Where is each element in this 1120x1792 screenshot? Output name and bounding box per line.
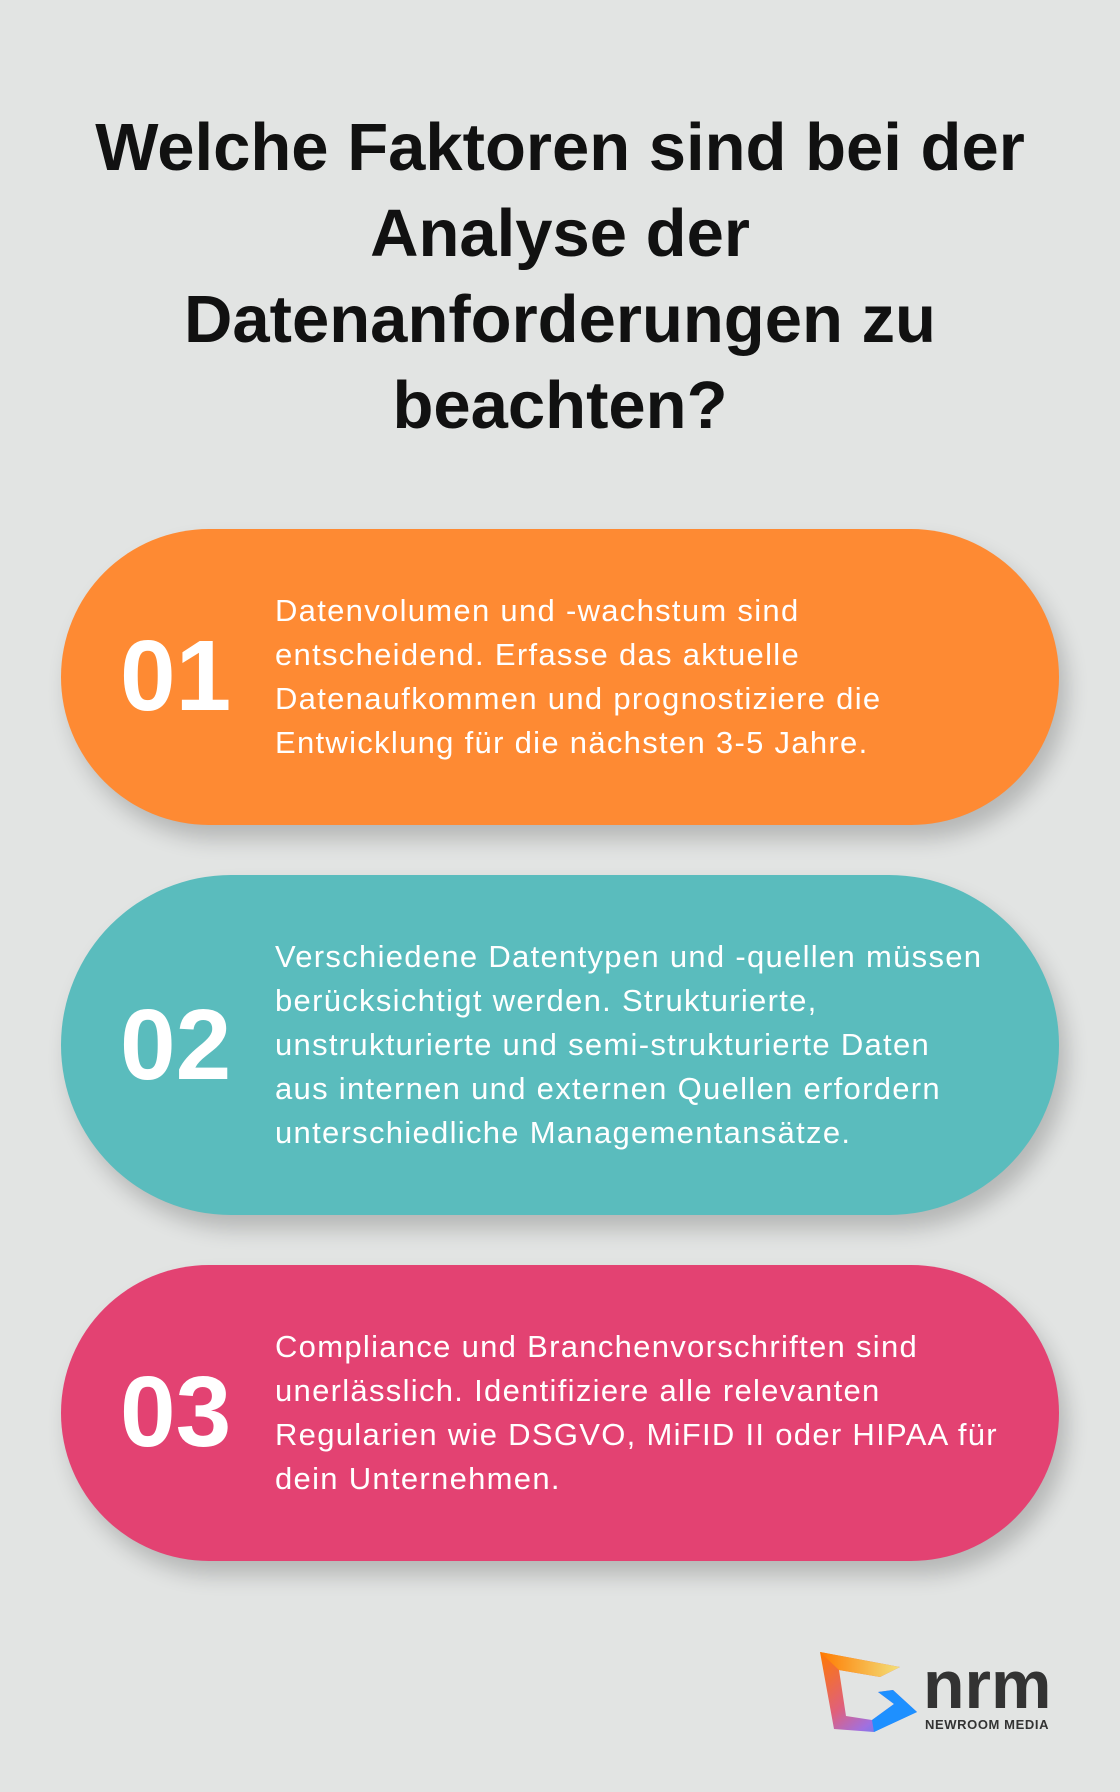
text 02: aus internen und externen Quellen erfordern [275, 1071, 941, 1106]
number 02: 02 [120, 989, 231, 1101]
text 01: Entwicklung für die nächsten 3-5 Jahre. [275, 725, 869, 760]
text 03 [275, 1329, 998, 1496]
panel: 03 [61, 1265, 1059, 1561]
title: Analyse der [370, 196, 750, 271]
wordmark: nrm [923, 1647, 1051, 1723]
title: beachten? [392, 368, 728, 443]
text 01: Datenaufkommen und prognostiziere die [275, 681, 881, 716]
icon: logo mark [820, 1652, 917, 1732]
text 02 [275, 939, 982, 1150]
text 01: Datenvolumen und -wachstum sind [275, 593, 800, 628]
title: Welche Faktoren sind bei der [95, 110, 1025, 185]
text 03: Regularien wie DSGVO, MiFID II oder HIPAA für [275, 1417, 998, 1452]
text 03: dein Unternehmen. [275, 1461, 561, 1496]
text 03: unerlässlich. Identifiziere alle relevanten [275, 1373, 881, 1408]
panel: 01 [61, 529, 1059, 825]
text 02: berücksichtigt werden. Strukturierte, [275, 983, 818, 1018]
title [95, 110, 1025, 443]
text 01 [275, 593, 881, 760]
text 02: unterschiedliche Managementansätze. [275, 1115, 851, 1150]
panel: 02 [61, 875, 1059, 1215]
logo [820, 1647, 1051, 1732]
text 01: entscheidend. Erfasse das aktuelle [275, 637, 800, 672]
text 02: unstrukturierte und semi-strukturierte Daten [275, 1027, 930, 1062]
logo: NEWROOM MEDIA [925, 1717, 1049, 1732]
title: Datenanforderungen zu [184, 282, 936, 357]
text 03: Compliance und Branchenvorschriften sind [275, 1329, 918, 1364]
text 02: Verschiedene Datentypen und -quellen müssen [275, 939, 982, 974]
number 03: 03 [120, 1356, 231, 1468]
number 01: 01 [120, 620, 231, 732]
